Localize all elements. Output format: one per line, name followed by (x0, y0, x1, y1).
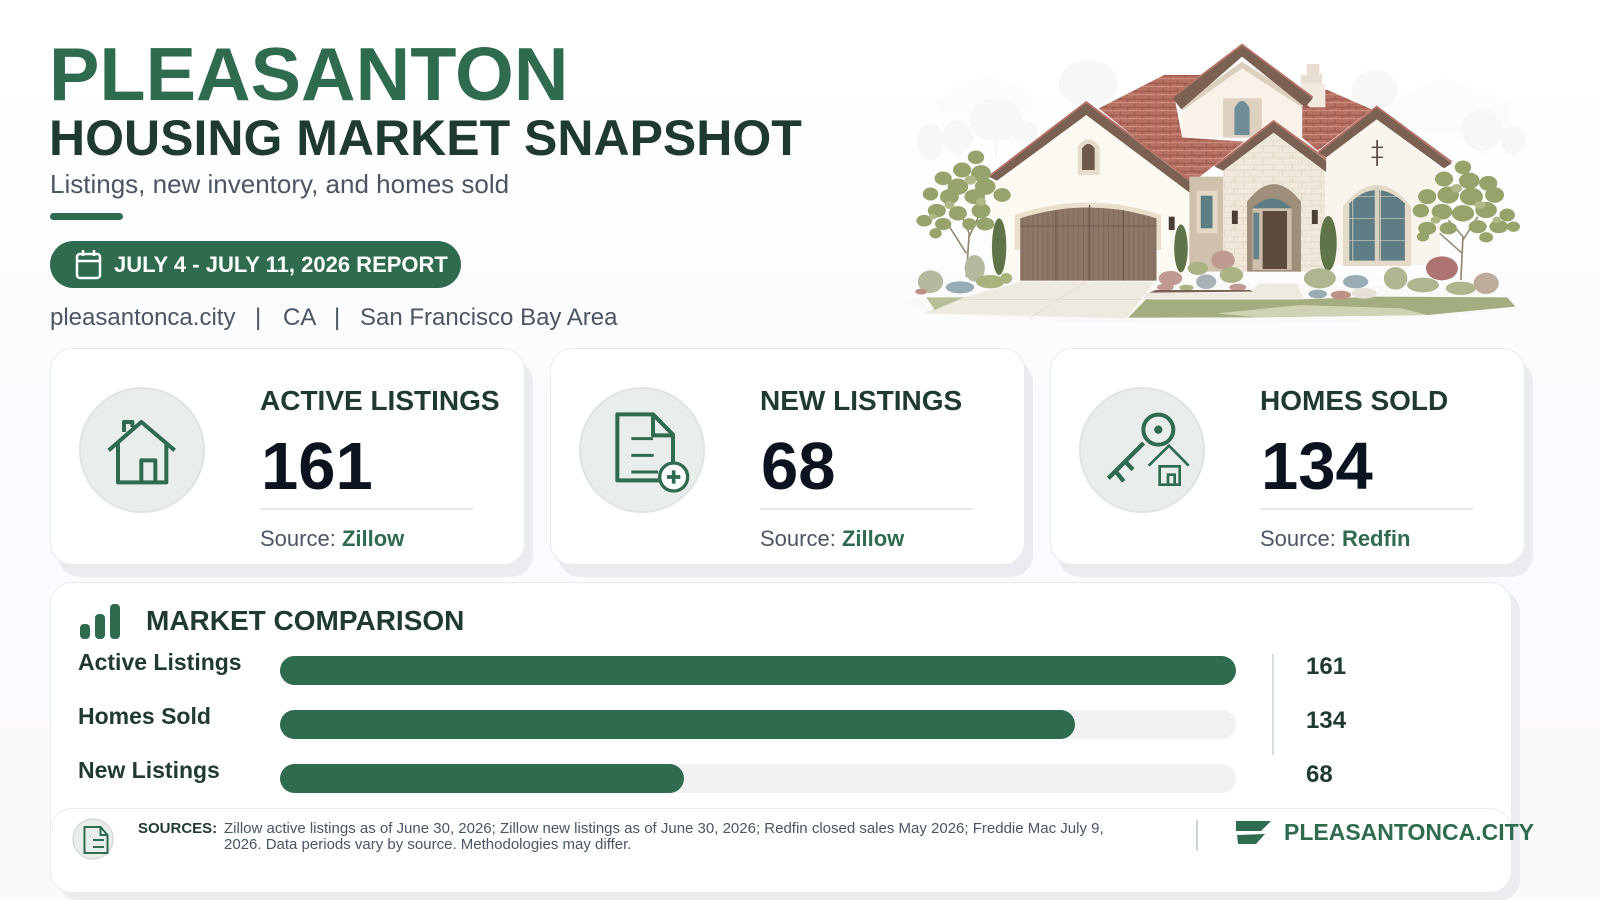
label: NEW LISTINGS (760, 385, 962, 416)
stone gable (1223, 133, 1325, 272)
date pill (50, 241, 461, 288)
panel: homes sold (1050, 348, 1525, 565)
lamp left (1169, 217, 1175, 230)
label: HOMES SOLD (1260, 385, 1448, 416)
icon: calendar (76, 250, 102, 280)
panel: market comparison (50, 582, 1512, 893)
icon: logo mark (1236, 821, 1271, 844)
value: 161 (261, 429, 373, 504)
value: 134 (1261, 429, 1373, 504)
source: Source: Zillow (260, 526, 404, 551)
left tree (918, 152, 1009, 277)
row label: new listings: New Listings (78, 757, 220, 783)
location line: pleasantonca.city (50, 304, 235, 331)
panel: new listings (550, 348, 1025, 565)
label: ACTIVE LISTINGS (260, 385, 500, 416)
sources text: SOURCES: (138, 820, 217, 837)
panel: sources footer (50, 808, 1512, 893)
ground soft edge (905, 283, 1511, 323)
bar: new listings (280, 764, 1236, 793)
cypress shrubs (992, 216, 1337, 275)
bar: homes sold (280, 710, 1236, 739)
title: PLEASANTON (49, 33, 568, 117)
value: homes sold: 134 (1306, 707, 1346, 734)
back roofs (1099, 75, 1244, 183)
value: 68 (761, 429, 836, 504)
value: new listings: 68 (1306, 761, 1333, 788)
wall lamps (1232, 210, 1318, 224)
garden beds (915, 251, 1499, 299)
heading: MARKET COMPARISON (146, 605, 464, 636)
right gable (1326, 120, 1440, 265)
accent bar (50, 213, 123, 220)
entry block (1189, 177, 1223, 272)
icon: bars (80, 604, 120, 639)
panel: sources footer: Zillow active listings as of June 30, 2026; Zillow new listings as of June 30, 2026; Redfin closed sales May 2026; Freddie Mac July 9, (224, 820, 1104, 837)
house illustration (915, 44, 1521, 319)
heading: HOUSING MARKET SNAPSHOT (49, 110, 802, 166)
row label: active listings: Active Listings (78, 649, 242, 675)
row label: homes sold: Homes Sold (78, 703, 211, 729)
location line: San Francisco Bay Area (360, 304, 617, 331)
gable vent (1078, 139, 1100, 175)
garage arch and door (1015, 202, 1161, 281)
lawn (1128, 297, 1516, 318)
logo text: PLEASANTONCA.CITY (1284, 819, 1534, 845)
icon: document plus (579, 387, 705, 513)
left wing wall (990, 115, 1189, 281)
right tree (1415, 162, 1518, 280)
subtitle: Listings, new inventory, and homes sold (50, 169, 509, 199)
source: Source: Redfin (1260, 526, 1410, 551)
panel: sources footer: 2026. Data periods vary by source. Methodologies may differ. (224, 836, 631, 853)
value: active listings: 161 (1306, 653, 1346, 680)
icon: document (72, 818, 114, 860)
source: Source: Zillow (760, 526, 904, 551)
icon: house (79, 387, 205, 513)
date text: JULY 4 - JULY 11, 2026 REPORT (114, 252, 448, 277)
location line: | (334, 304, 340, 331)
location line (50, 304, 618, 331)
logo (1236, 819, 1534, 845)
driveway and path (922, 282, 1154, 318)
panel: active listings (50, 348, 525, 565)
location line: CA (283, 304, 316, 331)
bar: active listings (280, 656, 1236, 685)
chimney (1301, 83, 1325, 107)
icon: key and house (1079, 387, 1205, 513)
faded background neighbourhood (917, 60, 1526, 160)
upper gable (1182, 62, 1302, 137)
location line: | (255, 304, 261, 331)
